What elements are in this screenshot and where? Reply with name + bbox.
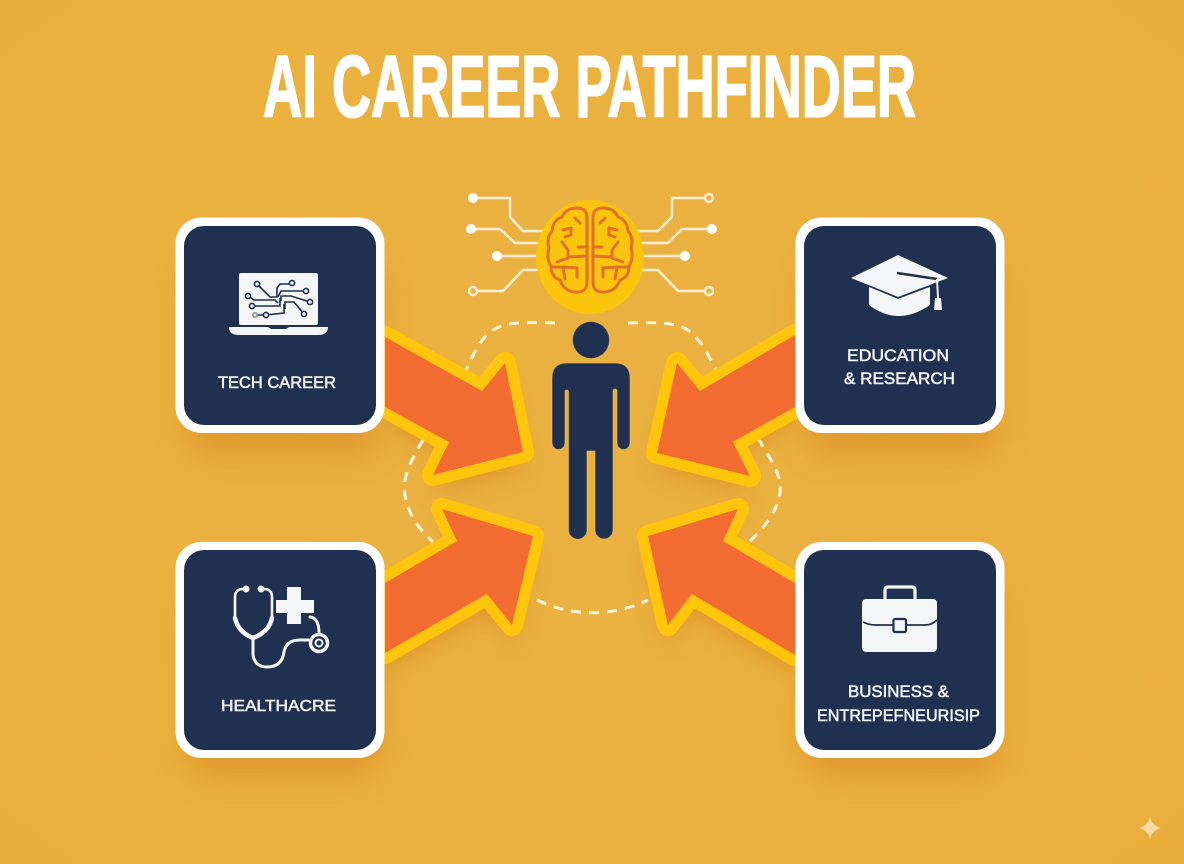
label: business and entrepreneurship: ENTREPEFNEURISIP	[817, 706, 980, 725]
label: business and entrepreneurship: BUSINESS &	[848, 682, 950, 701]
arrow: bottom left	[385, 509, 533, 653]
panel: business and entrepreneurship	[796, 542, 1004, 758]
panel: healthcare	[176, 542, 384, 758]
arrow: bottom right	[648, 509, 795, 655]
person figure	[552, 322, 630, 539]
label: business and entrepreneurship	[817, 682, 980, 725]
label: education and research	[844, 346, 955, 388]
label: education and research: & RESEARCH	[844, 369, 955, 388]
label: education and research: EDUCATION	[847, 346, 949, 365]
soft shadows under cards and arrows	[185, 262, 1000, 777]
icon: AI brain with circuit lines	[466, 193, 717, 314]
icon: briefcase	[862, 587, 937, 652]
panel: education and research	[796, 218, 1004, 433]
circuit lines	[466, 193, 717, 295]
panel: tech career	[176, 218, 384, 433]
arrow: top left	[385, 337, 523, 475]
icon: sparkle watermark	[1139, 817, 1161, 839]
icon: stethoscope with medical cross	[235, 586, 328, 667]
arrow: top right	[657, 335, 795, 476]
right hemisphere	[593, 208, 632, 292]
dashed path around person	[404, 322, 780, 613]
label: healthacre: HEALTHACRE	[221, 698, 336, 715]
label: tech career: TECH CAREER	[218, 373, 336, 392]
icon: laptop with circuit	[229, 273, 328, 335]
brain disc	[536, 200, 644, 314]
left hemisphere	[548, 208, 587, 292]
icon: graduation cap	[851, 255, 948, 316]
